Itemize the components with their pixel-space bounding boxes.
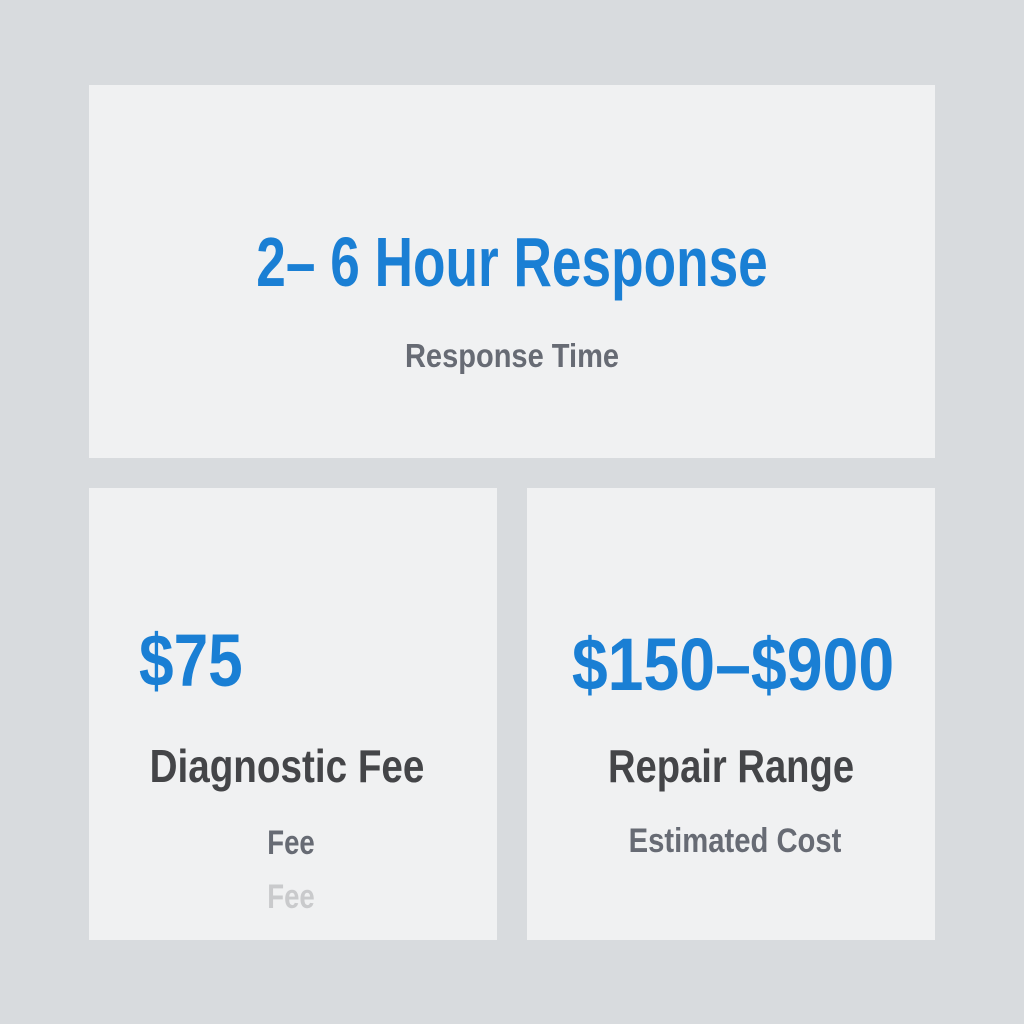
panel: repair range [527,488,935,940]
label: fee faded: Fee [267,878,315,916]
panel: response time [89,85,935,458]
label: fee: Fee [267,824,315,862]
panel: diagnostic fee [89,488,497,940]
value: $75: $75 [139,619,243,702]
label: response time: Response Time [405,337,619,374]
label: estimated cost: Estimated Cost [629,822,841,860]
heading: diagnostic fee: Diagnostic Fee [150,740,424,792]
heading: 2-6 hour response: 2– 6 Hour Response [256,223,768,301]
value: $150-$900: $150–$900 [572,623,894,706]
heading: repair range: Repair Range [608,740,854,792]
